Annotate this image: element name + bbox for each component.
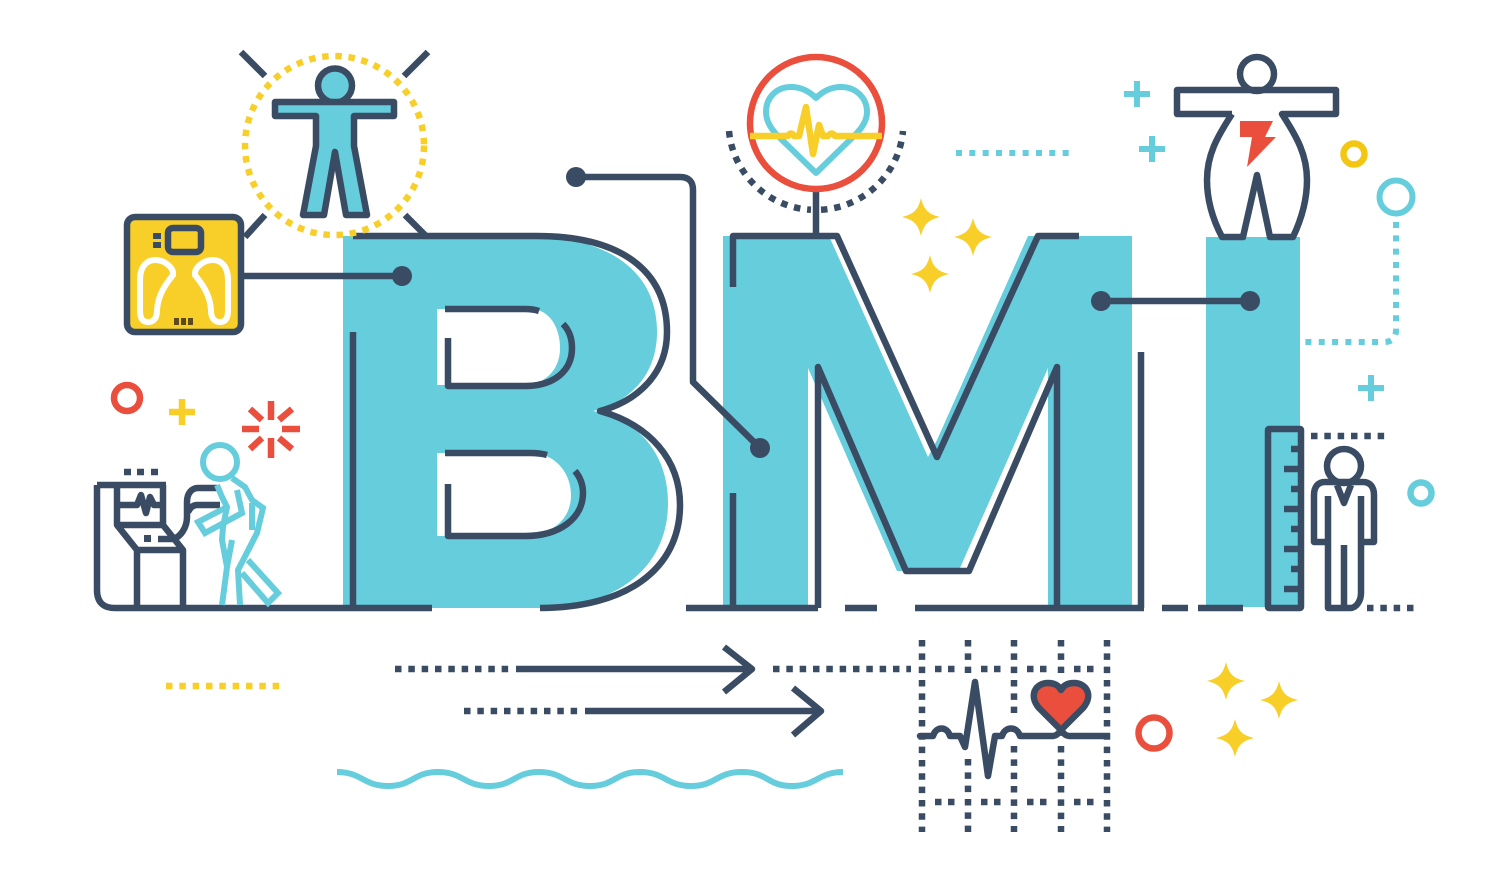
icon: sparkles bottom: [1207, 662, 1298, 757]
connector: scale to B: [244, 266, 412, 286]
icon: treadmill machine: [97, 472, 280, 608]
icon: overweight person: [1177, 57, 1336, 237]
icon: red ring left: [114, 385, 140, 411]
icon: cyan ring with dotted line: [1303, 180, 1412, 342]
arrow: upper: [395, 647, 752, 692]
letter B: [343, 236, 680, 608]
icon: red burst: [242, 401, 300, 458]
letter M: [723, 236, 1141, 608]
icon: yellow plus left: [169, 399, 195, 425]
icon: body in dotted circle: [241, 52, 428, 237]
dotted lines by ruler: [1311, 436, 1416, 608]
icon: yellow ring: [1344, 144, 1364, 164]
dotted line top: [956, 150, 1070, 156]
letter I: [1206, 237, 1300, 607]
chart: ECG grid with heart: [773, 640, 1110, 832]
icon: sparkles top: [902, 198, 992, 293]
icon: small cyan ring: [1410, 482, 1432, 504]
icon: weighing scale: [127, 217, 241, 332]
dotted line yellow: [166, 683, 280, 689]
connector: M to I: [1091, 291, 1260, 311]
icon: heart in red circle: [729, 57, 903, 237]
arrow: lower: [464, 688, 821, 735]
connector: B to M: [566, 167, 770, 458]
icon: red ring bottom: [1138, 718, 1170, 748]
icon: cyan plus signs: [1124, 81, 1384, 401]
icon: man being measured: [1314, 449, 1374, 608]
baseline: [280, 605, 1243, 611]
icon: ruler: [1268, 429, 1301, 608]
wave: [337, 772, 843, 786]
icon: walking person: [198, 445, 278, 605]
